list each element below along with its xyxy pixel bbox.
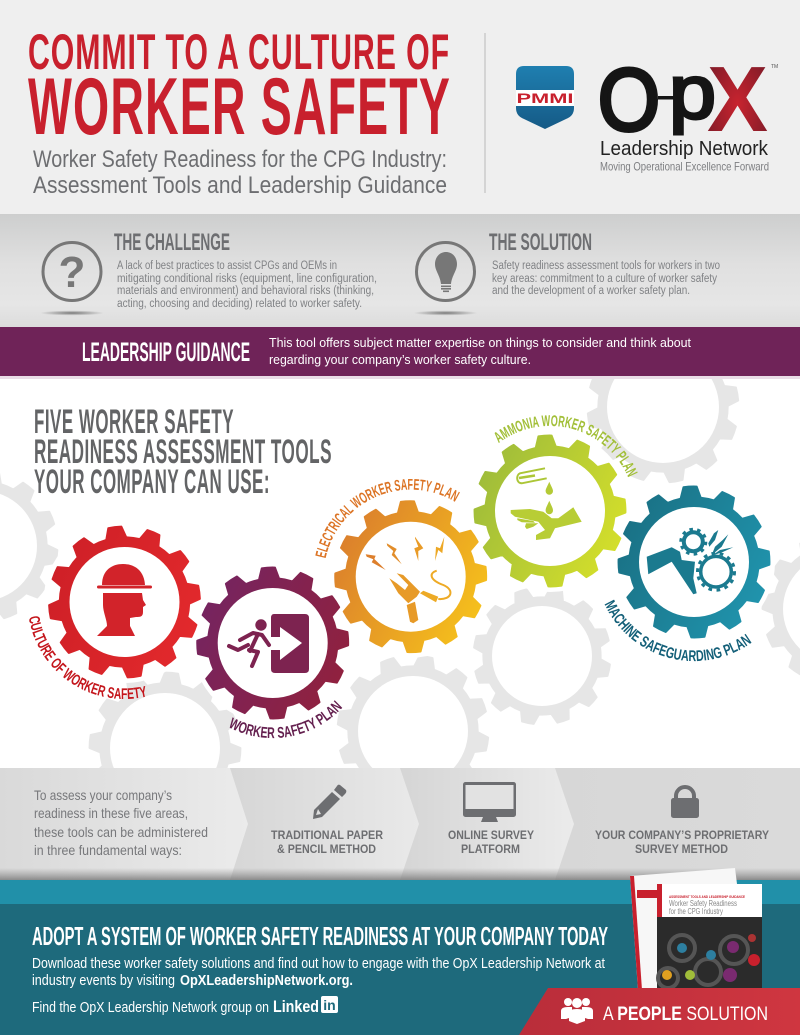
- header panel: [0, 0, 800, 214]
- heading: five assessment tools: FIVE WORKER SAFETY: [34, 403, 234, 441]
- label: machine safeguarding plan: MACHINE SAFEGUARDING PLAN: [604, 600, 752, 662]
- text: the challenge: mitigating conditional risks (equipment, line configuration,: [117, 273, 377, 285]
- logo: OpX: [598, 47, 778, 174]
- background gears: [0, 310, 800, 830]
- icon: corrosive substance on hand: [511, 468, 582, 540]
- icon: people: [561, 998, 593, 1024]
- text: how tools are administered: To assess your company’s: [34, 787, 172, 803]
- logo: OpX: p: [669, 50, 716, 135]
- text: the challenge: materials and environment) and behavioral risks (thinking,: [117, 285, 374, 297]
- text: the solution: THE SOLUTION: [489, 229, 592, 256]
- label: paper and pencil: TRADITIONAL PAPER: [271, 828, 383, 842]
- label: online survey: [448, 828, 534, 856]
- icon: question mark: [40, 242, 104, 316]
- logo: PMMI: [516, 66, 574, 129]
- icon: running person and exit door: [229, 614, 309, 673]
- gear: electrical worker safety plan: [309, 475, 512, 678]
- heading: five assessment tools: [34, 403, 332, 501]
- gear halos: [44, 430, 775, 724]
- panel: call to action: [0, 868, 800, 1035]
- text: the challenge: [114, 229, 377, 310]
- gear: machine safeguarding plan: [593, 461, 795, 663]
- text: download details: Download these worker safety solutions and find out how to engage with the OpX Leadership Network at: [32, 956, 605, 972]
- subtitle: [33, 146, 447, 199]
- image: report pages: for the CPG Industry: [669, 907, 723, 916]
- icon: linkedin wordmark: in: [323, 997, 336, 1013]
- label: electrical worker safety plan: ELECTRICAL WORKER SAFETY PLAN: [315, 479, 460, 558]
- image: report pages: [630, 868, 762, 990]
- image: report pages: Worker Safety Readiness: [669, 899, 737, 908]
- text: how tools are administered: in three fundamental ways:: [34, 842, 182, 858]
- panel: leadership guidance band: [0, 327, 800, 379]
- banner: a people solution: A PEOPLE SOLUTION: [603, 1004, 768, 1025]
- label: paper and pencil: [271, 828, 383, 856]
- text: guidance description: This tool offers subject matter expertise on things to consider and think about: [269, 335, 691, 350]
- text: the solution: and the development of a worker safety plan.: [492, 285, 690, 297]
- label: paper and pencil: & PENCIL METHOD: [277, 842, 376, 856]
- text: download details: industry events by visiting: [32, 973, 175, 989]
- text: the solution: key areas: commitment to a culture of worker safety: [492, 273, 717, 285]
- text: guidance description: regarding your company’s worker safety culture.: [269, 352, 531, 367]
- image: report pages: ASSESSMENT TOOLS AND LEADERSHIP GUIDANCE: [669, 894, 745, 899]
- text: how tools are administered: these tools can be administered: [34, 824, 208, 840]
- title: COMMIT TO A CULTURE OF: [28, 24, 450, 80]
- heading: five assessment tools: YOUR COMPANY CAN USE:: [34, 463, 270, 501]
- icon: monitor: [463, 782, 516, 822]
- panel: administration methods strip: [0, 768, 800, 880]
- label: proprietary survey: SURVEY METHOD: [635, 842, 728, 856]
- icon: light bulb: [414, 242, 478, 316]
- label: proprietary survey: [595, 828, 769, 856]
- banner: a people solution: [519, 988, 800, 1035]
- icon: head with hard hat: [97, 564, 152, 636]
- text: the solution: [489, 229, 720, 297]
- icon: lightning and clamp: [366, 537, 450, 623]
- text: how tools are administered: readiness in these five areas,: [34, 805, 188, 821]
- label: online survey: ONLINE SURVEY: [448, 828, 534, 842]
- label: proprietary survey: YOUR COMPANY’S PROPRIETARY: [595, 828, 769, 842]
- subtitle: Worker Safety Readiness for the CPG Industry:: [33, 146, 447, 173]
- title: WORKER SAFETY: [28, 62, 451, 152]
- text: the challenge: THE CHALLENGE: [114, 229, 230, 256]
- text: download details: [32, 956, 605, 1016]
- subtitle: Assessment Tools and Leadership Guidance: [33, 172, 447, 199]
- text: the challenge: A lack of best practices to assist CPGs and OEMs in: [117, 260, 337, 272]
- text: download details: Find the OpX Leadership Network group on: [32, 1000, 269, 1016]
- logo: OpX: TM: [771, 64, 778, 70]
- title: [28, 24, 451, 152]
- icon: linkedin wordmark: Linked: [273, 997, 319, 1016]
- gear: worker safety plan: [171, 542, 374, 744]
- icon: pencil: [313, 785, 346, 819]
- icon: padlock: [671, 787, 699, 818]
- label: worker safety plan: WORKER SAFETY PLAN: [230, 700, 342, 738]
- label: ammonia worker safety plan: AMMONIA WORKER SAFETY PLAN: [494, 415, 638, 478]
- heading: five assessment tools: READINESS ASSESSMENT TOOLS: [34, 433, 332, 471]
- logo: OpX: Leadership Network: [600, 138, 769, 160]
- heading: leadership guidance: LEADERSHIP GUIDANCE: [82, 337, 250, 367]
- text: the challenge: acting, choosing and deciding) related to worker safety.: [117, 298, 362, 310]
- icon: hand and machine gears: [647, 529, 734, 594]
- text: the solution: Safety readiness assessment tools for workers in two: [492, 260, 720, 272]
- gear: culture of worker safety: [26, 503, 223, 701]
- text: guidance description: [269, 335, 691, 367]
- text: download details: OpXLeadershipNetwork.org.: [180, 973, 353, 989]
- logo: PMMI: PMMI: [516, 90, 574, 106]
- icon: question mark: ?: [59, 248, 85, 297]
- label: culture of worker safety: CULTURE OF WORKER SAFETY: [29, 616, 146, 699]
- logo: OpX: X: [707, 47, 768, 151]
- panel: challenge and solution: [0, 214, 800, 327]
- label: online survey: PLATFORM: [461, 842, 520, 856]
- gear: ammonia worker safety plan: [449, 410, 651, 612]
- text: how tools are administered: [34, 787, 208, 858]
- logo: OpX: O: [598, 50, 660, 149]
